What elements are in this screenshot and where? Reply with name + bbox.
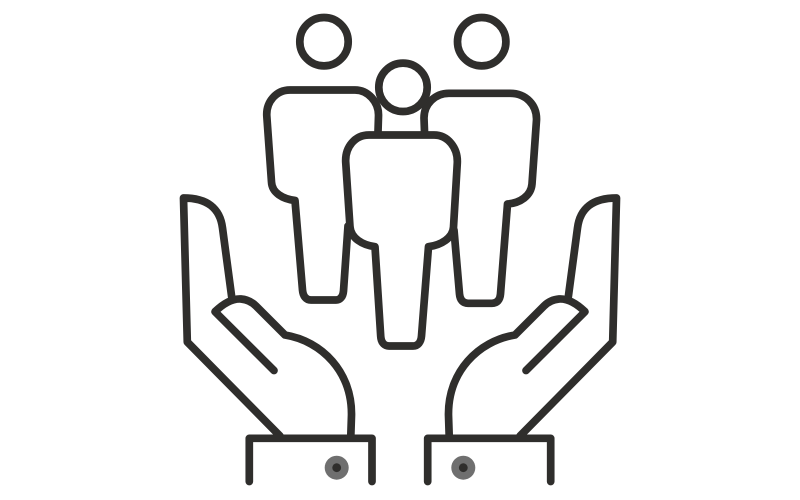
right hand thumb bbox=[448, 299, 585, 436]
left person body bbox=[267, 90, 379, 300]
left cuff button bbox=[325, 456, 349, 480]
centre person body bbox=[346, 135, 457, 346]
right person body bbox=[424, 93, 537, 303]
left shirt cuff bbox=[249, 438, 372, 482]
right shirt cuff bbox=[428, 438, 551, 482]
icon: left person bbox=[267, 18, 379, 300]
icon: right hand bbox=[428, 198, 616, 482]
icon: centre person bbox=[346, 63, 457, 346]
left person head bbox=[300, 18, 348, 66]
left hand thumb bbox=[215, 299, 352, 436]
right cuff button bbox=[451, 456, 475, 480]
icon: right person bbox=[424, 18, 537, 303]
right person head bbox=[458, 18, 506, 66]
centre person head bbox=[379, 63, 427, 112]
right hand palm and fingers bbox=[520, 198, 616, 436]
left hand palm and fingers bbox=[184, 198, 280, 436]
icon: left hand bbox=[184, 198, 372, 482]
